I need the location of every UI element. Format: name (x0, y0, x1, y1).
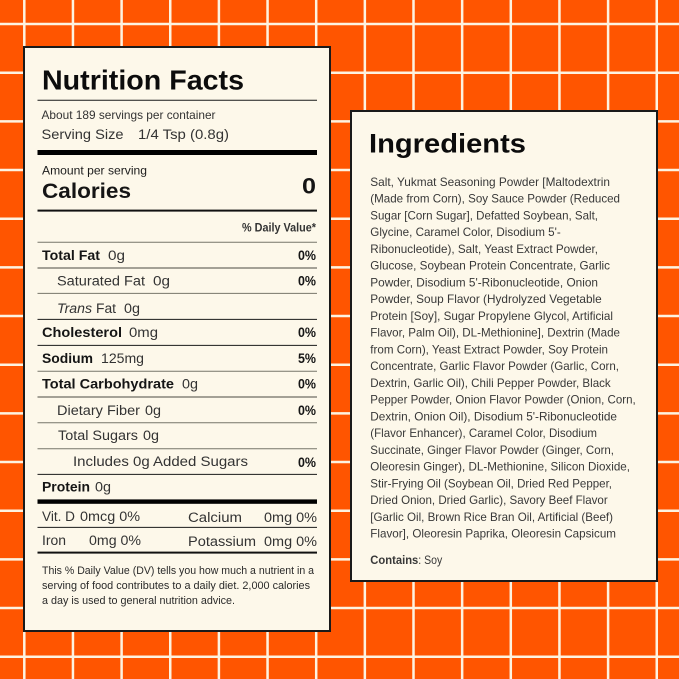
row: iron and potassium: 0mg 0% (89, 533, 141, 549)
ingredients list: (Made from Corn), Soy Sauce Powder (Reduced (370, 192, 620, 206)
row: sodium: Sodium (42, 351, 93, 367)
row: protein: Protein (42, 480, 90, 496)
row: vitamin D and calcium: Vit. D (42, 509, 75, 525)
row: sodium: 5% (298, 351, 316, 367)
row: dietary fiber (57, 403, 316, 419)
ingredients list: [Garlic Oil, Brown Rice Bran Oil, Artificial (Beef) (370, 510, 613, 524)
ingredients list: Ribonucleotide), Salt, Yeast Extract Powder, (370, 242, 598, 256)
row: dietary fiber: Dietary Fiber (57, 403, 140, 419)
panel: nutrition facts (24, 47, 330, 631)
row: trans fat (57, 301, 140, 317)
ingredients list: Succinate, Ginger Flavor Powder (Ginger, Corn, (370, 443, 614, 457)
row: protein: 0g (95, 480, 111, 496)
row: trans fat: Fat (96, 301, 116, 317)
ingredients list: Dextrin, Garlic Oil), Chili Pepper Powder, Black (370, 376, 611, 390)
row: total carbohydrate: Total Carbohydrate (42, 377, 174, 393)
row: trans fat: 0g (124, 301, 140, 317)
row: vitamin D and calcium: 0mcg 0% (80, 509, 140, 525)
serving size: Serving Size (42, 127, 124, 143)
row: iron and potassium: Iron (42, 533, 66, 549)
row: sodium: 125mg (101, 351, 144, 367)
row: added sugars: Includes 0g Added Sugars (73, 454, 248, 470)
row: cholesterol (42, 325, 316, 341)
allergen statement: Contains (370, 553, 419, 567)
ingredients list: Glucose, Soybean Protein Concentrate, Garlic (370, 259, 610, 273)
row: total carbohydrate: 0% (298, 377, 316, 393)
ingredients list: Powder, Soup Flavor (Hydrolyzed Vegetable (370, 292, 602, 306)
row: trans fat: Trans (57, 301, 92, 317)
row: total fat: Total Fat (42, 248, 100, 264)
row: vitamin D and calcium: Calcium (188, 510, 242, 526)
footnote: serving of food contributes to a daily diet. 2,000 calories (42, 580, 310, 592)
row: vitamin D and calcium (42, 509, 317, 526)
calories value: 0 (302, 174, 316, 199)
ingredients list: Glycine, Caramel Color, Disodium 5'- (370, 225, 561, 239)
allergen statement: : Soy (418, 553, 442, 567)
ingredients list: Flavor], Oleoresin Paprika, Oleoresin Capsicum (370, 526, 616, 540)
row: cholesterol: 0mg (129, 325, 158, 341)
row: total carbohydrate: 0g (182, 377, 198, 393)
row: cholesterol: Cholesterol (42, 325, 122, 341)
servings per container: About 189 servings per container (42, 108, 216, 122)
ingredients list: Pepper Powder, Onion Flavor Powder (Onion, Corn, (370, 393, 636, 407)
panel: ingredients (351, 111, 657, 581)
amount per serving: Amount per serving (42, 163, 147, 177)
ingredients list: (Flavor Enhancer), Caramel Color, Disodium (370, 426, 597, 440)
row: dietary fiber: 0g (145, 403, 161, 419)
heading: nutrition facts: Nutrition Facts (42, 64, 244, 95)
row: iron and potassium: Potassium (188, 534, 256, 550)
row: total carbohydrate (42, 377, 316, 393)
footnote (42, 565, 314, 607)
ingredients list: Protein [Soy], Sugar Propylene Glycol, Artificial (370, 309, 613, 323)
ingredients list: from Corn), Yeast Extract Powder, Soy Protein (370, 342, 608, 356)
serving size (42, 127, 229, 143)
serving size: 1/4 Tsp (0.8g) (138, 127, 229, 143)
daily value header: % Daily Value* (242, 223, 316, 235)
ingredients list: Powder, Disodium 5'-Ribonucleotide, Onion (370, 276, 598, 290)
row: total fat: 0% (298, 248, 316, 264)
heading: ingredients: Ingredients (369, 129, 526, 159)
ingredients list: Sugar [Corn Sugar], Defatted Soybean, Salt, (370, 208, 598, 222)
ingredients list: Salt, Yukmat Seasoning Powder [Maltodextrin (370, 175, 610, 189)
ingredients list: Concentrate, Garlic Flavor Powder (Garlic, Corn, (370, 359, 619, 373)
row: total fat (42, 248, 316, 264)
calories label: Calories (42, 179, 131, 203)
row: iron and potassium: 0mg 0% (264, 534, 317, 550)
row: cholesterol: 0% (298, 325, 316, 341)
ingredients list (370, 175, 636, 540)
ingredients list: Oleoresin Ginger), DL-Methionine, Silicon Dioxide, (370, 460, 630, 474)
row: saturated fat: 0% (298, 274, 316, 290)
row: saturated fat: 0g (153, 274, 170, 290)
row: added sugars (73, 454, 316, 471)
row: saturated fat: Saturated Fat (57, 274, 145, 290)
row: total sugars: 0g (143, 428, 159, 444)
row: saturated fat (57, 274, 316, 290)
footnote: a day is used to general nutrition advice. (42, 595, 235, 607)
row: sodium (42, 351, 316, 367)
row: vitamin D and calcium: 0mg 0% (264, 510, 317, 526)
row: total fat: 0g (108, 248, 125, 264)
ingredients list: Stir-Frying Oil (Soybean Oil, Dried Red Pepper, (370, 476, 612, 490)
ingredients list: Dried Onion, Dried Garlic), Savory Beef Flavor (370, 493, 608, 507)
row: added sugars: 0% (298, 455, 316, 471)
row: dietary fiber: 0% (298, 403, 316, 419)
ingredients list: Dextrin, Onion Oil), Disodium 5'-Ribonucleotide (370, 410, 617, 424)
ingredients list: Flavor, Palm Oil), DL-Methionine], Dextrin (Made (370, 326, 620, 340)
row: iron and potassium (42, 533, 317, 550)
footnote: This % Daily Value (DV) tells you how much a nutrient in a (42, 565, 314, 577)
row: total sugars: Total Sugars (58, 428, 138, 444)
